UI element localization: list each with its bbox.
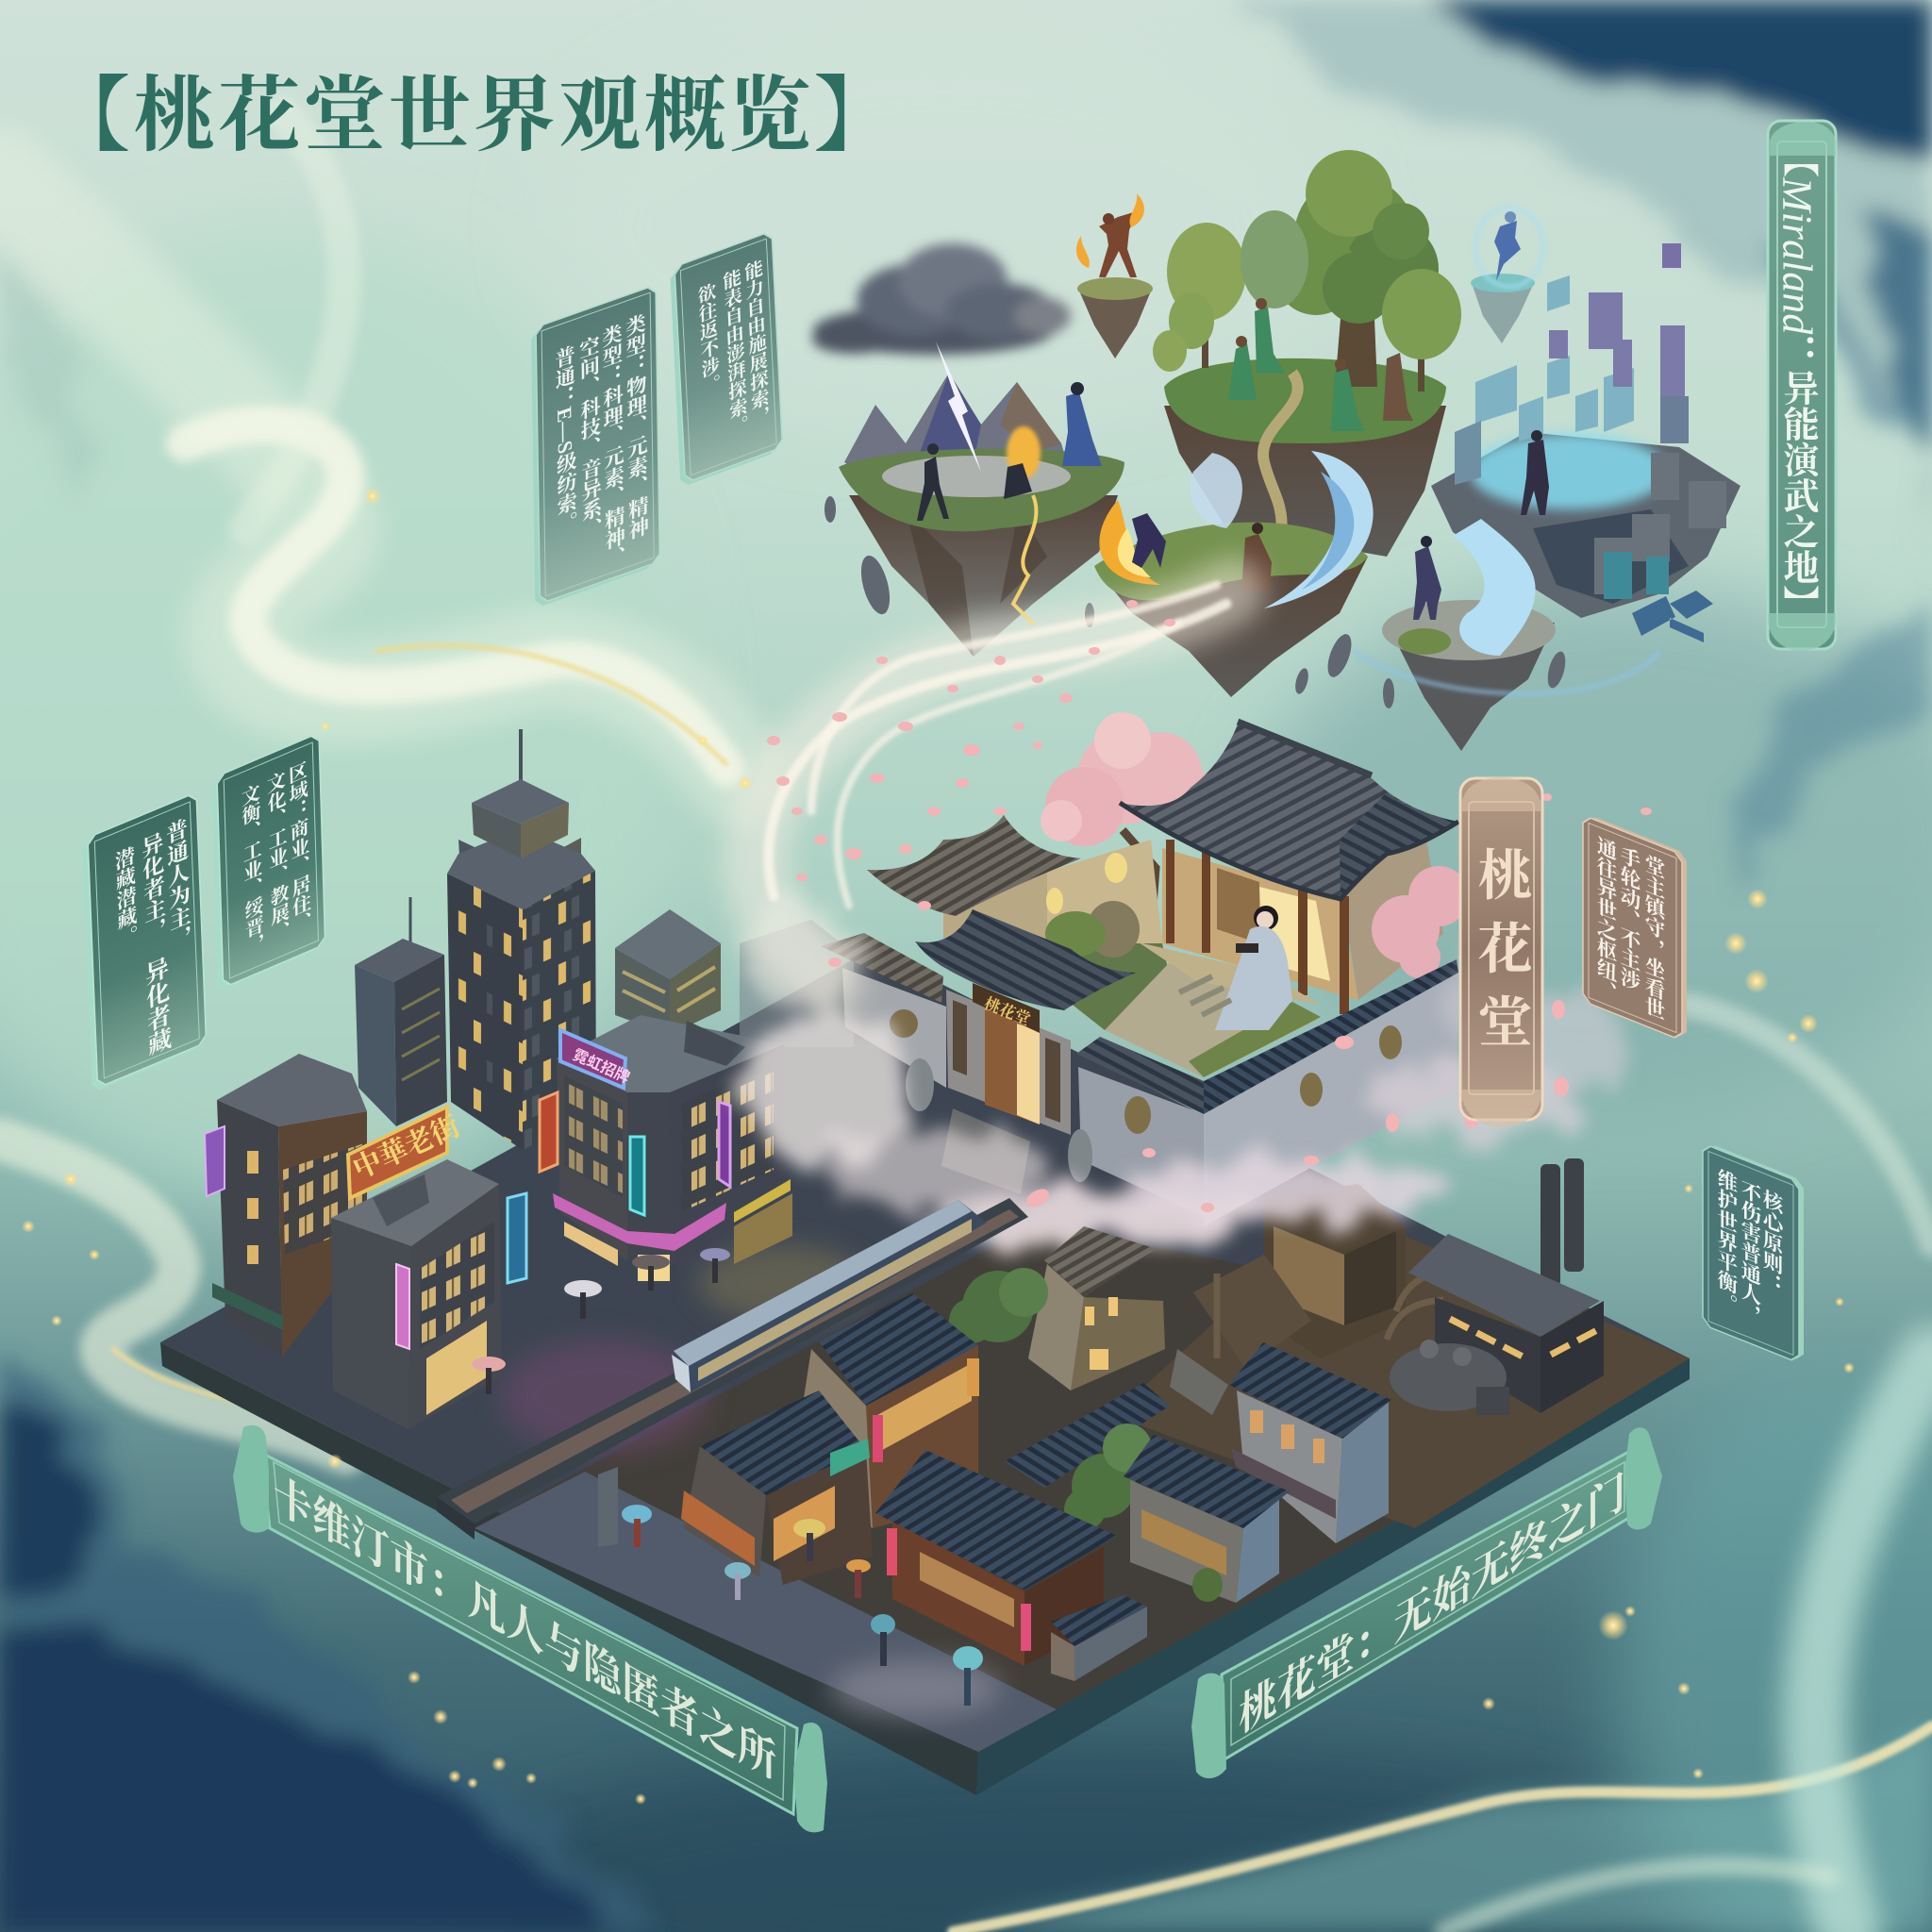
gray shed [1051, 1595, 1147, 1681]
banner: 卡维汀市 [233, 1425, 827, 1832]
corner shop building [540, 1015, 792, 1281]
panel: 普通人: 潜藏潜藏。 [112, 844, 139, 953]
hall walls [1162, 848, 1358, 1000]
ink wash: top right [1245, 0, 1932, 896]
gate [906, 909, 1136, 1194]
panel: 堂主 note: 通往异世之枢纽、 [1594, 832, 1617, 1004]
golden sparkles [22, 488, 1855, 1805]
tower: third [615, 909, 721, 1035]
cube island [1431, 243, 1740, 642]
cherry tree [1041, 712, 1208, 846]
panel: 核心原则: 核心原则： [1760, 1186, 1783, 1297]
mist: pink clouds [745, 896, 1632, 1247]
left courtyard wall [842, 968, 946, 1088]
courtyard: 桃花堂 [821, 712, 1469, 1226]
factory back block [1193, 1184, 1443, 1368]
panel: 普通人: 异化者主， [137, 829, 167, 948]
tablet: Miraland: 【 Miraland ：异能演武之地】 [1774, 142, 1821, 621]
small blue island [1471, 208, 1543, 343]
front brown house [875, 1450, 1117, 1666]
panel: 能力类型: 空间、科技、音异系、 [576, 333, 603, 544]
panel: 核心原则 [1703, 1141, 1804, 1365]
panel: 普通人: 异化者藏 [142, 954, 172, 1060]
elevated rail and train [437, 1198, 1028, 1547]
small cherry tree [1372, 866, 1469, 978]
energy swirl: upper left [0, 113, 736, 774]
back gray building [740, 920, 854, 1047]
panel: 堂主 note: 手轮动、不主涉 [1618, 841, 1641, 993]
front gray building [331, 1159, 526, 1429]
panel: 能力类型: 类型：物理、元素、精神 [623, 311, 649, 542]
panel: 核心原则: 维护世界平衡。 [1715, 1165, 1738, 1316]
banner: 桃花堂 [1191, 1427, 1662, 1778]
street people with umbrellas [472, 1248, 983, 1706]
roof house by rail [792, 1293, 979, 1528]
panel: 堂主 note [1583, 812, 1687, 1042]
panel: 能力类型: 类型：科理、元素、精神、 [599, 322, 625, 573]
front left brown building [205, 1054, 367, 1357]
neon: roof sign [560, 1030, 634, 1088]
floating islands: Miraland [812, 150, 1740, 751]
tablet: Miraland [1768, 121, 1836, 651]
old town: buildings [681, 1226, 1391, 1681]
scroll end [1191, 1674, 1226, 1778]
small fire island [1076, 193, 1153, 358]
energy swirl: lower right [943, 1005, 1932, 1932]
duel island [1094, 451, 1374, 697]
tower: second [355, 897, 447, 1126]
tower: skyscraper [447, 729, 596, 1150]
panel: 能力自由: 欲往返不涉。 [694, 280, 721, 399]
banner: 卡维汀市: 卡维汀市：凡人与隐匿者之所 [274, 1469, 776, 1790]
panel: 区域: 文衡、工业、绥晋， [238, 781, 265, 960]
gate plaque: 桃花堂 [982, 993, 1033, 1029]
back wall and wing [1028, 840, 1162, 981]
neon: roof sign: 霓虹招牌 [570, 1042, 634, 1088]
factory: chimneys and hall [1390, 1158, 1604, 1415]
panel: 能力类型: 普通：E—S级纺索。 [552, 342, 579, 538]
panel: 能力类型 [531, 285, 659, 608]
stall house [681, 1391, 873, 1585]
中華 neon billboard: 中華老街 [348, 1110, 464, 1185]
island: thunder mountains [839, 341, 1124, 657]
tablet: 桃花堂 name [1460, 777, 1542, 1127]
panel: 区域 [211, 733, 325, 993]
panel: 核心原则: 不伤害普通人， [1739, 1176, 1761, 1327]
main roof [1120, 724, 1458, 899]
panel: 能力自由: 能表自由澎湃探索。 [720, 266, 750, 440]
upper lit house [949, 1226, 1165, 1391]
petal wind stream [756, 585, 1232, 981]
panel: 能力自由 [670, 231, 783, 488]
platform: isometric base [160, 949, 1690, 1795]
panel: 普通人 [82, 792, 207, 1093]
tablet: 桃花堂 name: 桃花堂 [1470, 846, 1532, 1067]
panel: 能力自由: 能力自由施展探索， [741, 257, 772, 431]
petals [767, 600, 1652, 1212]
left wing roof [867, 815, 1081, 916]
gate plaque [973, 983, 1040, 1033]
forest island [1153, 150, 1461, 566]
panel: 区域: 文化、工业、教展、 [263, 768, 291, 947]
panel: 普通人: 普通人为主， [161, 815, 192, 957]
middle roof [1005, 1383, 1170, 1488]
energy swirl: lower left [0, 1140, 349, 1453]
title: 【桃花堂世界观概览】 [48, 70, 899, 161]
water island [1354, 519, 1660, 751]
lower gray house [1124, 1435, 1290, 1603]
reading woman [1215, 906, 1292, 1030]
courtyard floor [1105, 962, 1317, 1077]
ink wash: bottom left [0, 245, 679, 1932]
scroll end [1624, 1427, 1662, 1529]
scroll end [233, 1425, 269, 1533]
rock fragments [824, 496, 1569, 708]
tall gray house [1229, 1342, 1391, 1543]
panel: 堂主 note: 堂主镇守，坐看世 [1642, 851, 1665, 1023]
banner: 桃花堂: 桃花堂：无始无终之门 [1239, 1465, 1625, 1743]
front courtyard walls [1078, 1067, 1204, 1217]
storm cloud [812, 243, 1071, 355]
scroll end [793, 1723, 827, 1832]
panel: 区域: 区域：商业、居住、 [285, 759, 312, 939]
steps to hall [1179, 976, 1231, 1015]
